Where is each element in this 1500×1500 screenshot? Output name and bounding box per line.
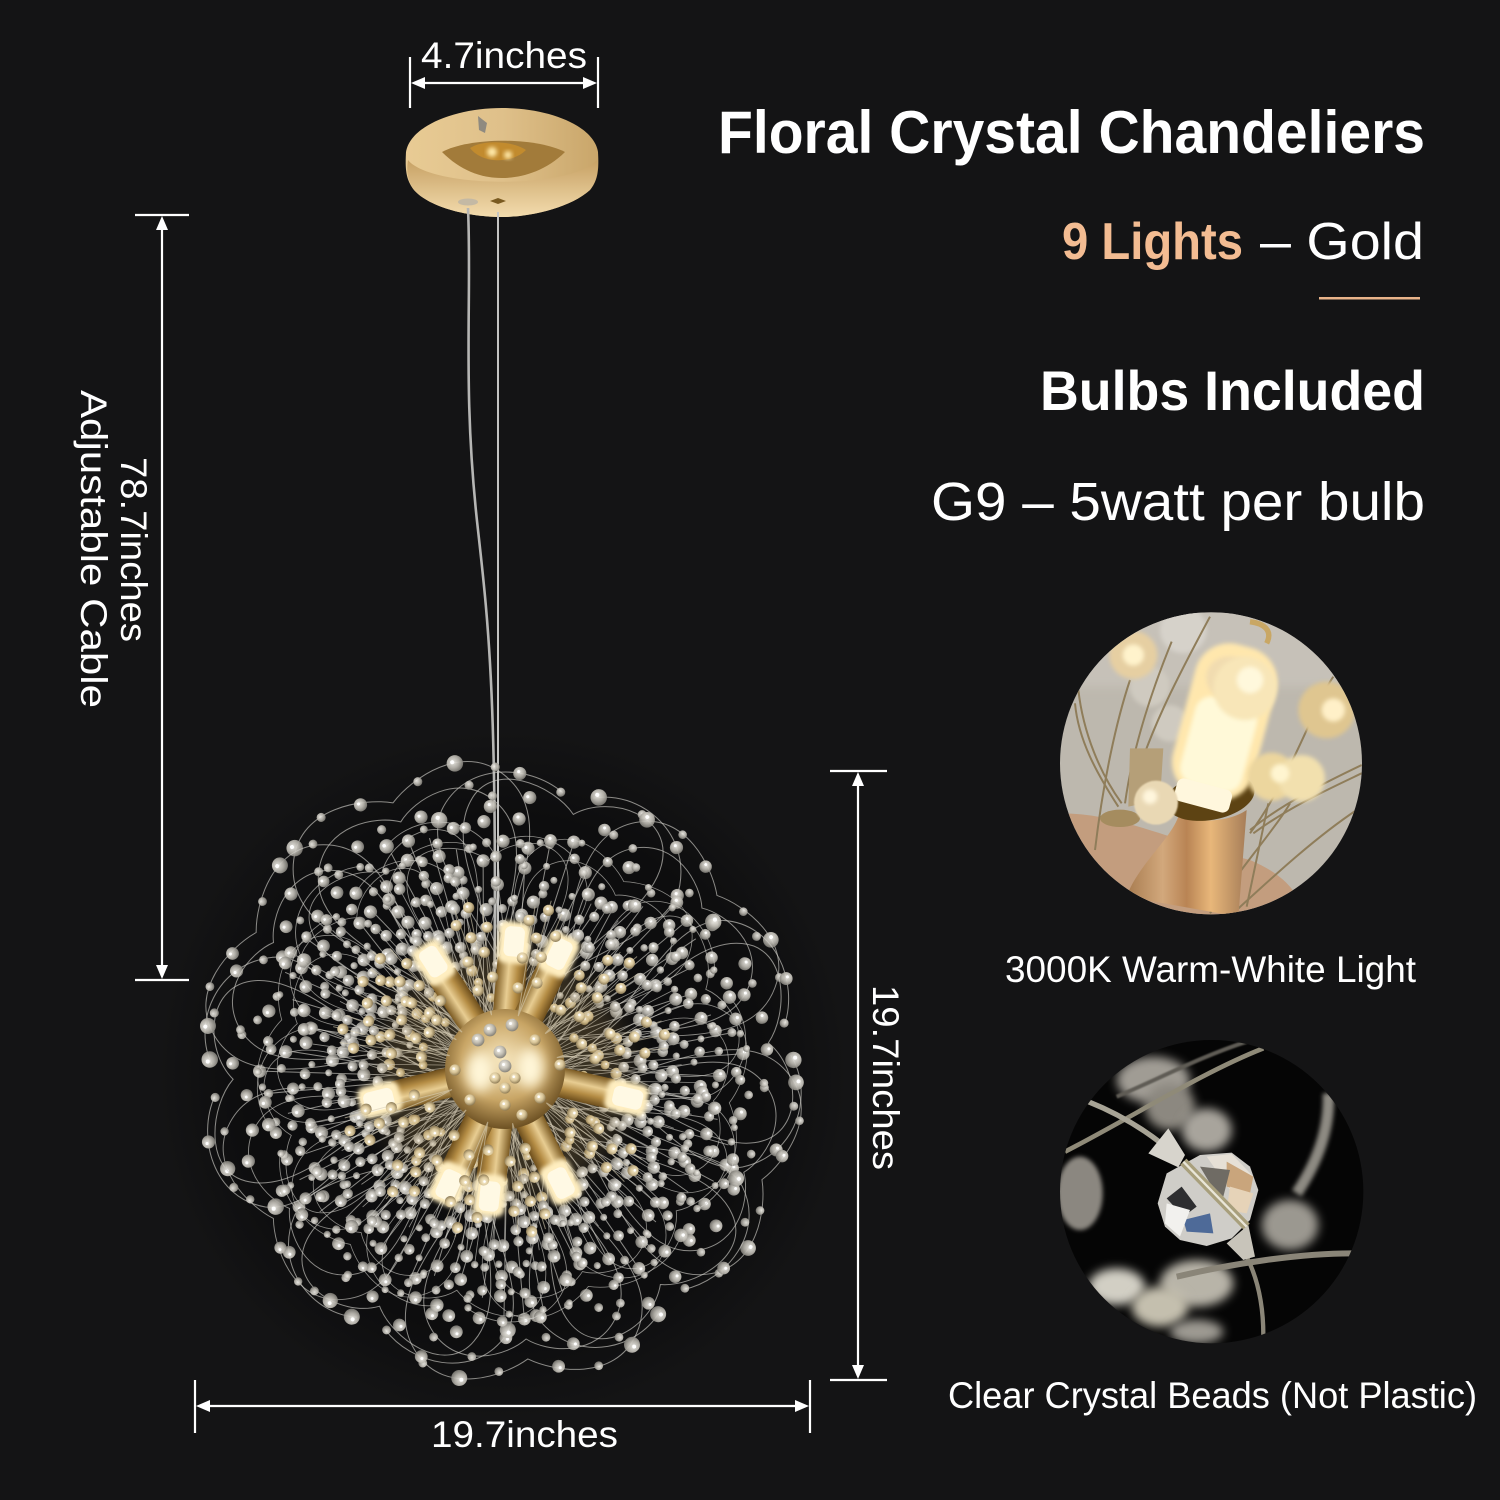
dimension: chandelier height	[830, 771, 906, 1380]
crystal petals	[172, 732, 829, 1395]
dimension: cable length	[73, 215, 189, 980]
subtitle: 9 lights gold	[1062, 213, 1424, 271]
dimension: chandelier width	[195, 1380, 810, 1455]
dimension: canopy width: 4.7inches	[421, 35, 587, 76]
warm inner crystal ring	[328, 894, 678, 1245]
caption: crystal beads: Clear Crystal Beads (Not Plastic)	[948, 1375, 1477, 1416]
dimension: cable length: 78.7inches	[113, 457, 154, 642]
main faceted bead	[1158, 1153, 1258, 1246]
subtitle: 9 lights gold: – Gold	[1260, 213, 1424, 271]
central gold sphere	[445, 1009, 566, 1129]
dimension: canopy width	[410, 35, 598, 108]
hanging cables	[468, 208, 498, 1010]
caption: warm white: 3000K Warm-White Light	[1005, 949, 1417, 990]
subtitle: 9 lights gold: 9 Lights	[1062, 213, 1243, 271]
photo circle: warm white bulb	[1060, 612, 1362, 914]
chandelier photo	[172, 732, 829, 1395]
accent line	[1319, 297, 1420, 300]
chandelier backdrop	[158, 730, 848, 1420]
gold socket tube	[1127, 810, 1247, 917]
warm glow	[378, 950, 628, 1200]
photo circle: crystal bead	[1060, 1040, 1364, 1344]
title: Floral Crystal Chandeliers	[718, 99, 1425, 166]
ceiling canopy	[406, 108, 598, 217]
text: bulb spec: G9 – 5watt per bulb	[931, 472, 1425, 532]
gold arms and bulbs	[356, 920, 651, 1218]
dimension: chandelier height: 19.7inches	[865, 985, 906, 1170]
bulb	[1170, 641, 1280, 813]
wire and caps	[1088, 1102, 1163, 1145]
dimension: cable length: Adjustable Cable	[73, 390, 114, 708]
heading: bulbs included: Bulbs Included	[1040, 359, 1425, 422]
dimension: chandelier width: 19.7inches	[431, 1414, 618, 1455]
